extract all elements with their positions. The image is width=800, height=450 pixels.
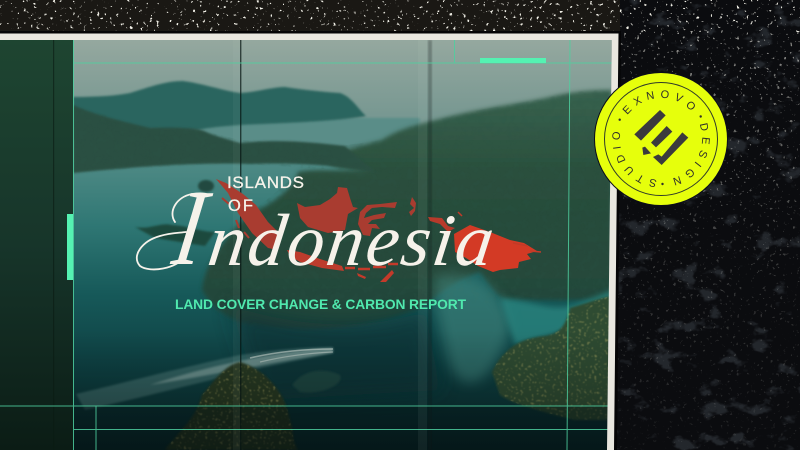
far headland <box>74 80 366 130</box>
green islet right <box>492 296 612 420</box>
paper fold right crease <box>428 40 432 450</box>
lake in the distance <box>190 118 420 150</box>
map of Indonesia in red brush <box>216 179 541 282</box>
I swash flourish <box>137 193 209 269</box>
small islet left <box>135 224 215 246</box>
Timor <box>357 270 394 282</box>
accent bar top <box>480 58 546 63</box>
eastern fragments <box>428 217 455 232</box>
brush splatter <box>458 212 541 252</box>
Sumatra side islets <box>222 198 249 238</box>
small rock near Sumatra <box>198 180 214 192</box>
paper fold right light <box>418 124 427 450</box>
speedboat wake <box>76 347 333 410</box>
paper fold left crease <box>240 40 241 450</box>
title: Islands of Indonesia: OF <box>228 197 253 215</box>
badge separator dots <box>618 115 702 185</box>
badge: Exnovo Design Studio <box>594 72 728 206</box>
photo: island landscape <box>73 40 620 450</box>
paper fold left light <box>233 226 240 450</box>
foreground tree <box>165 362 298 450</box>
subtitle: LAND COVER CHANGE & CARBON REPORT <box>175 297 467 312</box>
accent bar left <box>67 214 73 280</box>
script capital I: I <box>165 169 218 288</box>
main water <box>73 162 613 450</box>
Papua brush stroke <box>454 225 537 272</box>
dark water shade at lower centre <box>233 306 433 378</box>
paper frame shadow <box>0 31 621 450</box>
Maluku <box>409 197 416 216</box>
paper frame <box>0 34 618 450</box>
small bush <box>292 371 341 393</box>
Kalimantan <box>297 187 358 233</box>
teal channel <box>500 290 612 345</box>
title: Islands of Indonesia <box>137 169 499 288</box>
land texture <box>228 138 360 192</box>
Islands of: ISLANDS <box>227 173 304 192</box>
central and right land mass <box>202 90 612 329</box>
river foam <box>435 275 510 383</box>
badge: Exnovo Design Studio: DESIGN <box>673 123 710 186</box>
left side panel <box>0 40 73 450</box>
near shore band <box>73 105 375 173</box>
foliage highlights <box>160 290 620 450</box>
Lesser Sunda dashes <box>345 264 398 269</box>
guide lines <box>0 40 612 450</box>
script lowercase: ndonesia <box>204 200 499 282</box>
Java and Nusa Tenggara <box>287 250 344 271</box>
badge logo mark <box>634 110 688 165</box>
Sumatra <box>216 179 279 250</box>
lower photo darkening <box>74 348 608 450</box>
badge: Exnovo Design Studio: STUDIO <box>612 132 656 187</box>
badge ring text: EXNOVO <box>622 90 695 114</box>
Sulawesi <box>358 202 397 236</box>
